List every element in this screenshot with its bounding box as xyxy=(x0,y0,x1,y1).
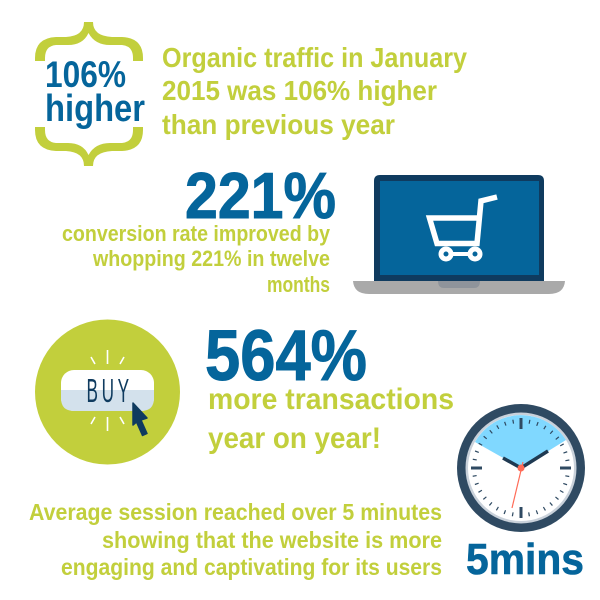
icon: top brace xyxy=(35,22,143,61)
clock face xyxy=(468,415,574,521)
elapsed time wedge xyxy=(475,415,566,468)
icon: laptop with cart xyxy=(353,175,565,294)
text block: conversion rate xyxy=(62,221,331,297)
green circle xyxy=(35,320,180,464)
badge: 106% higher xyxy=(35,22,145,166)
laptop base xyxy=(353,281,565,294)
clock hands xyxy=(503,451,548,468)
text block: average session: Average session reached over 5 minutes xyxy=(29,499,442,525)
text block: transactions: more transactions xyxy=(208,383,454,416)
text block: average session: engaging and captivating for its users xyxy=(61,554,442,580)
badge number: 106% xyxy=(45,54,126,95)
text block: transactions xyxy=(208,383,454,455)
button lower half xyxy=(61,390,154,411)
minute ticks xyxy=(474,421,568,515)
stat: 564%: 564% xyxy=(205,317,367,396)
text block: organic traffic: 2015 was 106% higher xyxy=(162,75,437,106)
laptop body xyxy=(374,175,544,281)
icon: buy button xyxy=(35,320,180,464)
text block: organic traffic: Organic traffic in January xyxy=(162,42,467,73)
clock inner ring xyxy=(466,412,576,524)
centre pin xyxy=(518,464,524,472)
text block: conversion rate: whopping 221% in twelve xyxy=(92,246,330,271)
icon: shopping cart xyxy=(430,197,497,259)
hour ticks xyxy=(471,418,571,518)
rays xyxy=(91,350,124,431)
clock rim xyxy=(457,404,585,532)
second hand xyxy=(512,462,523,508)
stat: 5mins: 5mins xyxy=(466,535,584,584)
icon: bottom brace xyxy=(35,127,143,166)
text block: average session xyxy=(29,499,442,580)
text block: organic traffic: than previous year xyxy=(162,109,395,140)
text block: conversion rate: conversion rate improved by xyxy=(62,221,331,246)
text block: transactions: year on year! xyxy=(208,422,381,455)
text block: average session: showing that the website is more xyxy=(102,527,442,553)
stat: 221%: 221% xyxy=(185,159,336,232)
text block: organic traffic xyxy=(162,42,467,140)
laptop screen xyxy=(380,181,539,275)
text block: conversion rate: months xyxy=(267,272,330,297)
badge label: higher xyxy=(45,88,145,130)
button xyxy=(61,370,154,411)
icon: clock xyxy=(457,404,585,532)
cursor arrow xyxy=(133,403,147,436)
laptop notch xyxy=(438,281,480,288)
button label: BUY xyxy=(86,372,129,410)
